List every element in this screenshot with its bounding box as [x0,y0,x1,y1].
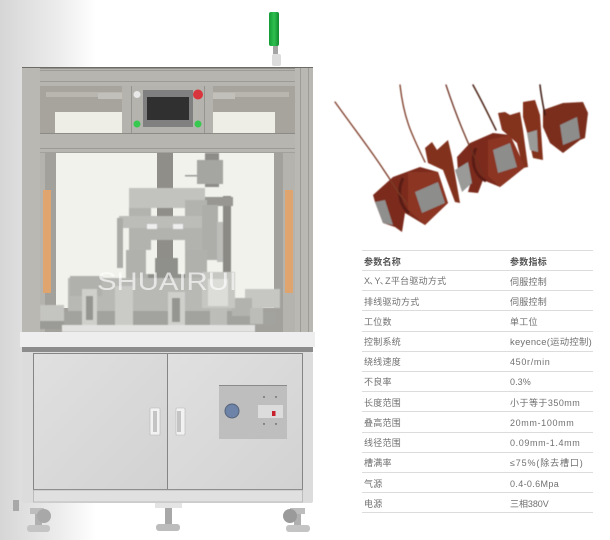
row: stack height: 20mm-100mm [510,418,574,428]
row: winding speed: 绕线速度 [364,356,401,367]
lower window [40,152,295,332]
header row [364,256,547,267]
row: wire drive: 排线驱动方式 [364,296,420,307]
row: stations [364,316,538,327]
row separators [362,250,593,513]
base rail [34,490,302,502]
winding mechanism [40,153,280,332]
row: XYZ drive: X、Y、Z平台驱动方式 [364,275,446,286]
row: slot fill: ≤75%(除去槽口) [510,457,583,468]
left door [34,354,168,490]
row: wire drive [364,296,547,307]
row: control system: keyence(运动控制) [510,336,592,347]
row: defect rate: 0.3% [510,377,531,387]
row: winding speed: 450r/min [510,357,550,367]
row: air source: 0.4-0.6Mpa [510,479,559,489]
control panel [122,86,213,133]
coil piece 4 [498,112,528,168]
coil 6 [543,102,588,153]
row: defect rate [364,376,531,387]
cabinet [22,352,313,503]
row: length range [364,397,580,408]
row: stack height [364,417,574,428]
feet [13,500,310,532]
coil piece 2 [425,140,472,203]
row: power: 三相380V [510,498,549,509]
row: XYZ drive: 伺服控制 [510,276,547,287]
row: slot fill: 槽满率 [364,457,392,468]
machine [13,12,315,532]
header row: 参数指标 [510,256,547,267]
lead wires [335,85,545,205]
header row: 参数名称 [364,256,401,267]
coils photo [335,85,588,232]
row: XYZ drive [364,275,547,287]
orange strip left [43,190,51,293]
watermark: SHUAIRUI [97,268,237,296]
row: length range: 长度范围 [364,397,401,408]
row: control system: 控制系统 [364,336,401,347]
electrical panel [219,385,287,439]
touch screen [143,90,193,127]
row: stations: 单工位 [510,316,538,327]
coil piece 5 [523,100,543,160]
row: control system [364,336,592,347]
row: winding speed [364,356,550,367]
coil 3 [457,133,525,193]
row: wire diameter [364,437,580,448]
buttons [134,90,203,128]
orange strip right [285,190,293,293]
signal lever [269,12,281,66]
table top [20,332,315,352]
frame [22,67,313,332]
row: air source: 气源 [364,478,383,489]
row: slot fill [364,457,583,468]
row: defect rate: 不良率 [364,376,392,387]
right door [168,354,302,490]
parameter table [362,250,593,513]
upper bay [40,86,295,133]
coil 1 [373,167,448,232]
row: wire diameter: 0.09mm-1.4mm [510,438,580,448]
row: power: 电源 [364,498,383,509]
background gradient [0,0,96,540]
row: length range: 小于等于350mm [510,397,580,408]
left handle [150,408,160,435]
right handle [176,408,185,435]
row: stations: 工位数 [364,316,392,327]
row: stack height: 叠高范围 [364,417,401,428]
row: power [364,498,549,509]
row: air source [364,478,559,489]
row: wire diameter: 线径范围 [364,437,401,448]
row: wire drive: 伺服控制 [510,296,547,307]
